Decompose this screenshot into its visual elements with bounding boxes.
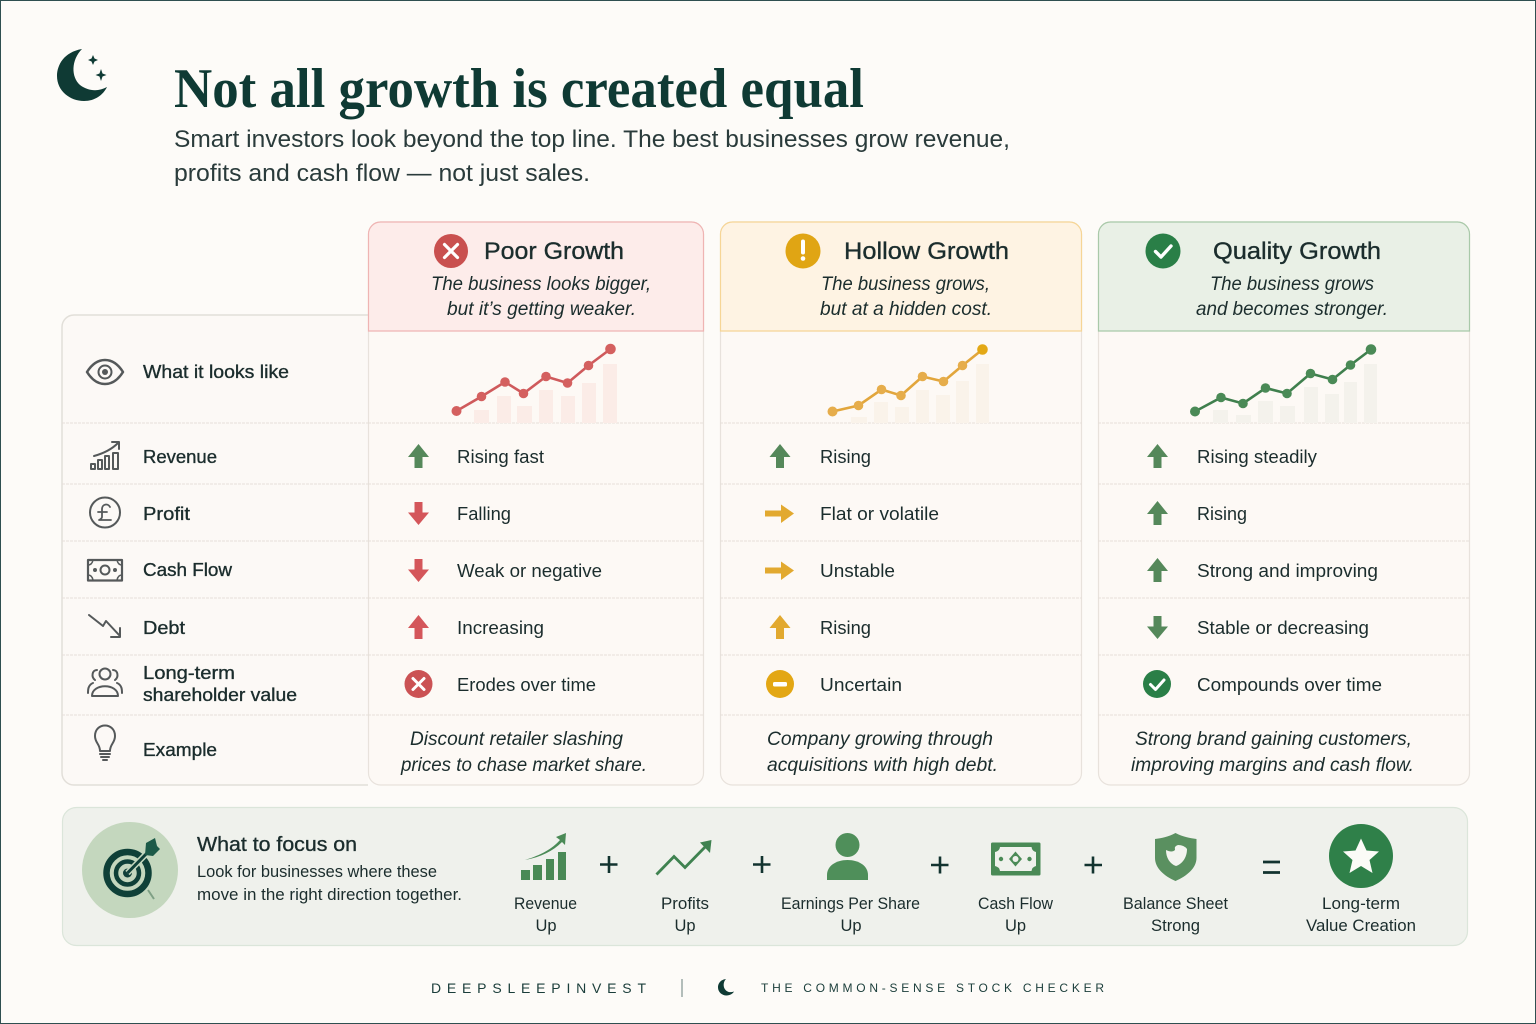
- label: balance sheet strong: Balance Sheet: [1123, 895, 1228, 913]
- icon: profits up: [656, 840, 712, 874]
- quality growth header: Quality Growth: [1213, 238, 1381, 265]
- revenue: rising: Rising: [820, 446, 871, 467]
- profit: rising: [1147, 501, 1247, 525]
- debt: increasing: [408, 615, 544, 639]
- icon: lightbulb: [95, 726, 115, 760]
- shareholder value: compounds over time: [1143, 670, 1382, 698]
- focus heading and text: [197, 834, 462, 904]
- row label: revenue: Revenue: [143, 447, 217, 467]
- cash flow: unstable: [765, 560, 895, 581]
- label: revenue up: [514, 895, 577, 935]
- example: hollow growth: [767, 729, 998, 776]
- footer: THE COMMON-SENSE STOCK CHECKER: [761, 981, 1104, 995]
- row label: example: Example: [143, 740, 217, 760]
- label: earnings per share up: [781, 895, 920, 935]
- focus heading and text: Look for businesses where these: [197, 863, 437, 881]
- quality growth header: [1098, 222, 1470, 331]
- row label: profit: Profit: [143, 504, 190, 524]
- example: hollow growth: Company growing through: [767, 729, 993, 750]
- panel: hollow growth: [720, 222, 1082, 785]
- cash flow: strong and improving: Strong and improving: [1197, 560, 1378, 581]
- row label: long-term shareholder value: shareholder value: [143, 685, 297, 705]
- poor growth header: [368, 222, 704, 331]
- debt: rising: Rising: [820, 617, 871, 638]
- footer: DEEPSLEEPINVEST: [431, 980, 646, 996]
- operator: plus: [600, 856, 618, 873]
- poor growth header: but it’s getting weaker.: [447, 299, 636, 320]
- operator: plus: [753, 856, 770, 873]
- icon: star circle: [1329, 824, 1393, 888]
- chart: hollow growth line: [828, 344, 989, 423]
- icon: banknote: [991, 842, 1040, 876]
- poor growth header: The business looks bigger,: [431, 274, 651, 295]
- profit: flat or volatile: Flat or volatile: [820, 503, 939, 524]
- label: balance sheet strong: Strong: [1151, 917, 1200, 935]
- row label: what it looks like: What it looks like: [143, 362, 289, 382]
- quality growth header: The business grows: [1210, 274, 1374, 295]
- label: revenue up: Up: [535, 917, 557, 935]
- example: poor growth: prices to chase market share.: [400, 755, 647, 776]
- example: poor growth: [400, 729, 647, 776]
- revenue: rising: [770, 444, 871, 468]
- footer: [431, 979, 1104, 997]
- label: long-term value creation: Long-term: [1322, 895, 1400, 913]
- cash flow: weak or negative: [408, 559, 602, 582]
- panel: poor growth: [368, 222, 704, 785]
- label: profits up: Up: [674, 917, 696, 935]
- example: poor growth: Discount retailer slashing: [410, 729, 623, 750]
- profit: flat or volatile: [765, 503, 939, 524]
- profit: falling: [408, 502, 511, 525]
- example: quality growth: Strong brand gaining customers,: [1135, 729, 1412, 750]
- cash flow: strong and improving: [1147, 558, 1378, 582]
- icon: eye: [87, 360, 123, 384]
- icon: people: [88, 668, 122, 696]
- hollow growth header: [720, 222, 1082, 331]
- icon: shield: [1155, 833, 1196, 881]
- profit: falling: Falling: [457, 503, 511, 524]
- debt: increasing: Increasing: [457, 617, 544, 638]
- revenue: rising steadily: [1147, 444, 1318, 468]
- chart: poor growth line: [452, 344, 617, 423]
- icon: revenue up: [521, 833, 566, 880]
- focus heading and text: What to focus on: [197, 834, 357, 856]
- label: cash flow up: Up: [1005, 917, 1026, 935]
- example: quality growth: improving margins and cash flow.: [1131, 755, 1414, 776]
- subtitle: Smart investors look beyond the top line. The best businesses grow revenue,: [174, 126, 1010, 153]
- example: quality growth: [1131, 729, 1414, 776]
- revenue: rising fast: Rising fast: [457, 446, 544, 467]
- icon: banknote: [88, 560, 122, 580]
- row label: long-term shareholder value: [143, 663, 297, 705]
- shareholder value: erodes over time: Erodes over time: [457, 674, 596, 695]
- hollow growth header: The business grows,: [821, 274, 990, 295]
- icon: moon logo: [57, 49, 107, 101]
- icon: target with dart: [82, 822, 178, 918]
- label: cash flow up: Cash Flow: [978, 895, 1053, 913]
- example: hollow growth: acquisitions with high debt.: [767, 755, 998, 776]
- label: long-term value creation: [1306, 895, 1416, 935]
- panel: what to focus on: [62, 808, 1468, 946]
- icon: pound: [90, 498, 120, 528]
- operator: equals: [1263, 862, 1280, 872]
- row label: cash flow: Cash Flow: [143, 560, 233, 580]
- icon: footer moon: [718, 979, 734, 996]
- label: long-term value creation: Value Creation: [1306, 917, 1416, 935]
- hollow growth header: but at a hidden cost.: [820, 299, 992, 320]
- revenue: rising steadily: Rising steadily: [1197, 446, 1318, 467]
- label: profits up: [661, 895, 709, 935]
- shareholder value: compounds over time: Compounds over time: [1197, 674, 1382, 695]
- label: earnings per share up: Up: [840, 917, 862, 935]
- operator: plus: [931, 856, 948, 874]
- icon: person: [827, 833, 868, 880]
- subtitle: profits and cash flow — not just sales.: [174, 160, 590, 187]
- shareholder value: uncertain: [766, 670, 902, 698]
- revenue: rising fast: [408, 444, 544, 468]
- cash flow: unstable: Unstable: [820, 560, 895, 581]
- profit: rising: Rising: [1197, 503, 1247, 524]
- debt: rising: [770, 615, 871, 639]
- quality growth header: and becomes stronger.: [1196, 299, 1388, 320]
- row label: long-term shareholder value: Long-term: [143, 663, 235, 683]
- debt: stable or decreasing: Stable or decreasing: [1197, 617, 1369, 638]
- hollow growth header: Hollow Growth: [844, 238, 1009, 265]
- operator: plus: [1084, 856, 1102, 874]
- icon: debt trend: [89, 615, 120, 637]
- label: earnings per share up: Earnings Per Share: [781, 895, 920, 913]
- panel: quality growth: [1098, 222, 1470, 785]
- shareholder value: uncertain: Uncertain: [820, 674, 902, 695]
- label: cash flow up: [978, 895, 1053, 935]
- poor growth header: Poor Growth: [484, 238, 624, 265]
- row label: debt: Debt: [143, 618, 185, 638]
- label: profits up: Profits: [661, 895, 709, 913]
- label: revenue up: Revenue: [514, 895, 577, 913]
- icon: revenue bars: [91, 442, 119, 469]
- label: balance sheet strong: [1123, 895, 1228, 935]
- debt: stable or decreasing: [1147, 616, 1369, 639]
- subtitle: [174, 126, 1010, 187]
- title: Not all growth is created equal: [174, 58, 864, 120]
- focus heading and text: move in the right direction together.: [197, 886, 462, 904]
- chart: quality growth line: [1190, 344, 1377, 423]
- shareholder value: erodes over time: [404, 670, 596, 698]
- cash flow: weak or negative: Weak or negative: [457, 560, 602, 581]
- panel: row labels: [62, 315, 368, 785]
